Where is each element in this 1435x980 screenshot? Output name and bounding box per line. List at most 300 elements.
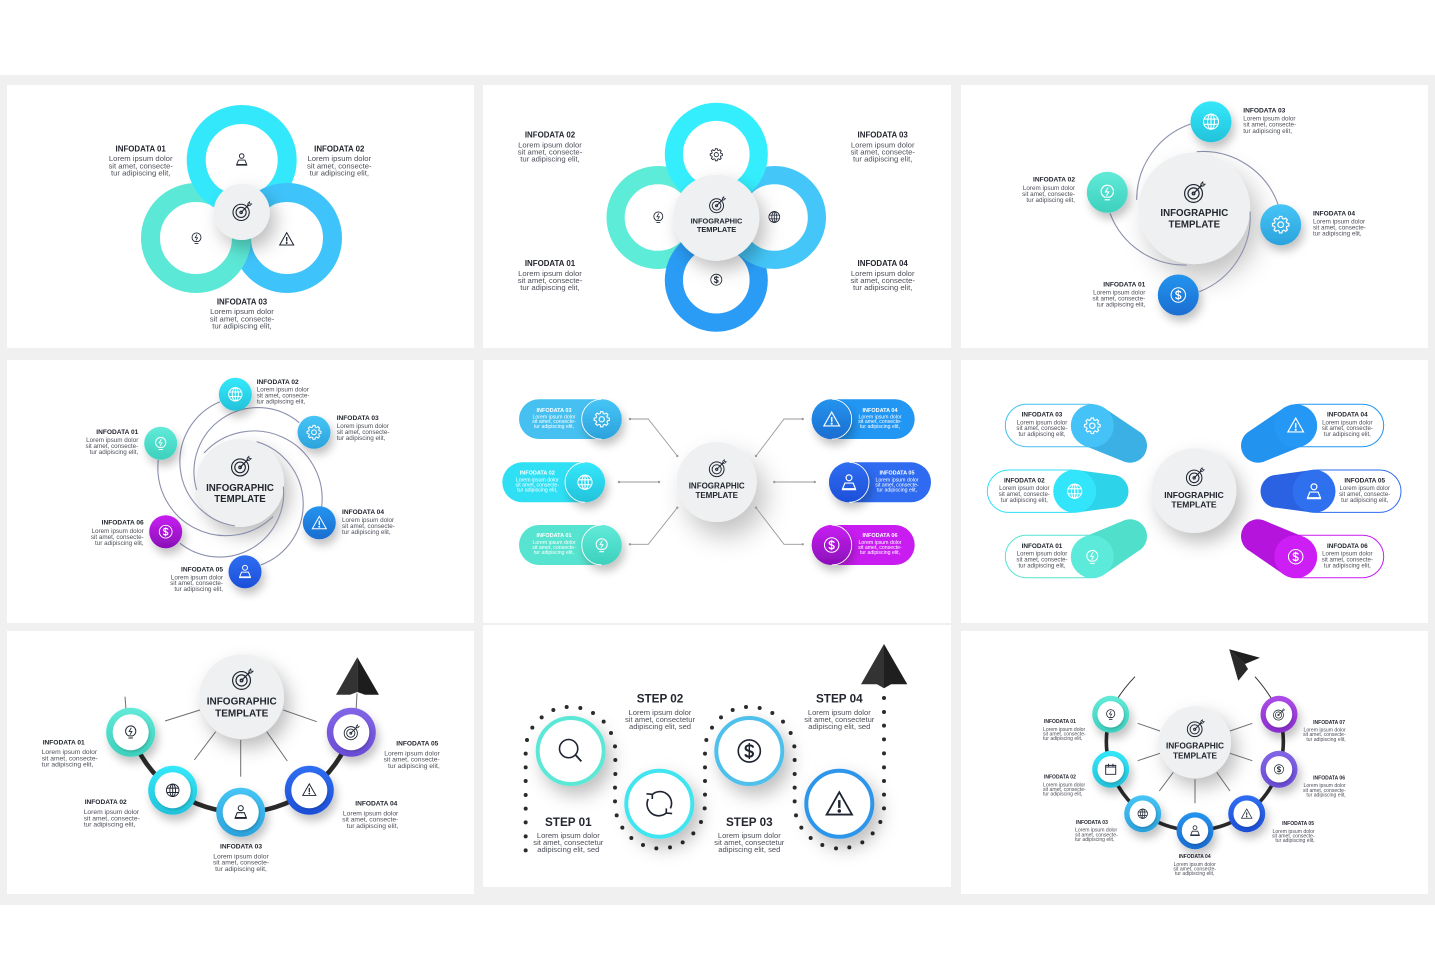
node: bulb [1092, 696, 1129, 733]
pill: infodata 01: sit amet, consecte- [532, 545, 576, 551]
text: infodata 06: INFODATA 06 [102, 520, 144, 527]
text: infodata 07: tur adipiscing elit, [1306, 737, 1346, 743]
node: dollar [1158, 274, 1199, 316]
text: infodata 04: sit amet, consecte- [1313, 225, 1366, 232]
text: infodata 03: INFODATA 03 [337, 415, 379, 422]
text: infodata 04: sit amet, consecte- [342, 523, 395, 530]
centre title [1160, 208, 1228, 230]
text: infodata 01: INFODATA 01 [1044, 719, 1076, 725]
text: infodata 04: Lorem ipsum dolor [343, 810, 399, 817]
pill: infodata 03 [1005, 404, 1147, 463]
centre title [691, 216, 743, 234]
text: infodata 03: tur adipiscing elit, [215, 866, 267, 873]
text: step 01: Lorem ipsum dolor [537, 831, 600, 840]
text: infodata 06: INFODATA 06 [1313, 776, 1345, 782]
pill: infodata 04: Lorem ipsum dolor [859, 414, 902, 420]
text: infodata 04: sit amet, consecte- [342, 817, 398, 824]
pill: infodata 02: INFODATA 02 [1004, 477, 1045, 484]
text: infodata 02 [518, 130, 583, 164]
pill: infodata 06: INFODATA 06 [1327, 543, 1368, 550]
pill: infodata 03: INFODATA 03 [1022, 412, 1063, 419]
text: infodata 01: Lorem ipsum dolor [1093, 290, 1145, 297]
text: infodata 05: tur adipiscing elit, [1275, 838, 1315, 844]
text: infodata 01: tur adipiscing elit, [111, 169, 170, 178]
pill: infodata 05: INFODATA 05 [1344, 477, 1385, 484]
step 03 circle [716, 718, 782, 784]
text: infodata 02 [307, 144, 372, 178]
text: infodata 04: sit amet, consecte- [850, 276, 915, 285]
text: infodata 01: Lorem ipsum dolor [42, 749, 98, 756]
text: infodata 01: sit amet, consecte- [518, 276, 583, 285]
text: infodata 03 [210, 298, 275, 331]
text: infodata 02 [84, 799, 140, 828]
text: infodata 02: INFODATA 02 [525, 130, 576, 140]
node: globe [1124, 795, 1161, 832]
spiral arcs [158, 402, 322, 565]
pill: infodata 06: Lorem ipsum dolor [1322, 550, 1373, 558]
pill: infodata 01: Lorem ipsum dolor [1017, 550, 1067, 558]
top curves [1117, 677, 1272, 700]
centre title [1164, 490, 1224, 509]
text: infodata 03: INFODATA 03 [1243, 108, 1286, 115]
centre title: INFOGRAPHIC [689, 482, 745, 491]
pill: infodata 04 [812, 399, 915, 439]
icon: target [232, 456, 251, 476]
text: infodata 01: Lorem ipsum dolor [109, 154, 173, 163]
pill: infodata 02 [987, 470, 1129, 513]
text: infodata 04: INFODATA 04 [1313, 210, 1355, 217]
text: infodata 07: sit amet, consecte- [1303, 732, 1346, 738]
text: infodata 02: INFODATA 02 [1033, 177, 1075, 184]
text: step 03: STEP 03 [726, 816, 773, 829]
text: infodata 01: Lorem ipsum dolor [518, 269, 582, 278]
text: infodata 02: Lorem ipsum dolor [1043, 782, 1085, 788]
text: infodata 02: sit amet, consecte- [257, 393, 310, 400]
text: infodata 01 [85, 429, 139, 456]
text: infodata 03: tur adipiscing elit, [1243, 128, 1292, 135]
panel: four overlapping rings [483, 85, 951, 348]
text: infodata 05 [384, 741, 440, 770]
pill: infodata 05: sit amet, consecte- [1339, 491, 1390, 498]
centre title: INFOGRAPHIC [1164, 490, 1224, 500]
centre title: TEMPLATE [1173, 751, 1218, 761]
icon: target [233, 669, 253, 689]
icon: target [1187, 720, 1204, 737]
icon: target [1186, 468, 1204, 486]
text: step 04: STEP 04 [816, 692, 863, 706]
text: infodata 03: Lorem ipsum dolor [213, 853, 269, 860]
text: infodata 01: tur adipiscing elit, [1043, 736, 1082, 742]
text: infodata 01: INFODATA 01 [525, 259, 576, 268]
panel: four node orbit [961, 85, 1428, 348]
paper plane [1229, 649, 1260, 681]
pill: infodata 02: Lorem ipsum dolor [999, 485, 1050, 492]
text: step 04: sit amet, consectetur [804, 715, 875, 724]
icon: gear [710, 149, 722, 161]
icon: target [1185, 182, 1205, 202]
text: infodata 03: INFODATA 03 [217, 298, 268, 306]
text: infodata 04 [1313, 210, 1366, 238]
text: infodata 04: INFODATA 04 [858, 259, 908, 268]
centre disc [1159, 706, 1231, 778]
centre title: TEMPLATE [215, 708, 269, 719]
centre title: INFOGRAPHIC [206, 483, 274, 494]
ring: cyan [196, 114, 287, 206]
node: dollar [1260, 751, 1298, 788]
dotted path [524, 696, 886, 852]
pill: infodata 01: tur adipiscing elit, [1018, 562, 1066, 570]
text: infodata 05: sit amet, consecte- [170, 580, 223, 587]
text: step 02 [625, 692, 696, 731]
text: infodata 01: Lorem ipsum dolor [1043, 727, 1085, 733]
text: infodata 02: Lorem ipsum dolor [518, 140, 582, 149]
text: infodata 02: INFODATA 02 [257, 379, 299, 386]
text: infodata 02: sit amet, consecte- [84, 815, 140, 822]
pill: infodata 03: sit amet, consecte- [532, 419, 576, 425]
text: infodata 03: INFODATA 03 [1076, 820, 1108, 826]
centre title [689, 482, 745, 500]
pill: infodata 01: sit amet, consecte- [1016, 556, 1068, 564]
pill: infodata 03: Lorem ipsum dolor [533, 414, 576, 420]
panel: three overlapping rings [7, 85, 474, 348]
text: infodata 01: tur adipiscing elit, [42, 762, 94, 769]
text: infodata 02: tur adipiscing elit, [1043, 792, 1082, 798]
ring: blue [242, 192, 332, 284]
pill: infodata 03: Lorem ipsum dolor [1017, 420, 1067, 426]
centre title: INFOGRAPHIC [1166, 741, 1224, 751]
text: infodata 04: tur adipiscing elit, [347, 823, 398, 830]
node: globe [1190, 101, 1232, 142]
text: infodata 04: tur adipiscing elit, [1175, 871, 1214, 877]
text: step 01: adipiscing elit, sed [537, 845, 599, 854]
connectors [618, 418, 816, 546]
text: step 01: STEP 01 [545, 816, 592, 829]
text: infodata 04: sit amet, consecte- [1173, 866, 1216, 872]
text: infodata 06: tur adipiscing elit, [1306, 792, 1346, 798]
text: infodata 01: sit amet, consecte- [108, 161, 173, 170]
pill: infodata 03: tur adipiscing elit, [534, 424, 574, 430]
text: infodata 03: sit amet, consecte- [213, 860, 269, 867]
centre title: INFOGRAPHIC [1160, 208, 1228, 219]
text: infodata 04 [342, 509, 395, 536]
pill: infodata 03: sit amet, consecte- [1016, 425, 1068, 432]
pill: infodata 05: INFODATA 05 [879, 471, 915, 477]
pill: infodata 06 [1241, 519, 1384, 578]
node: bulb [106, 708, 155, 757]
pill: infodata 02: tur adipiscing elit, [1001, 497, 1048, 504]
text: infodata 03: sit amet, consecte- [210, 314, 275, 323]
text: infodata 01 [1043, 719, 1086, 742]
node: globe [219, 378, 252, 411]
pill: infodata 05 [829, 462, 931, 502]
text: infodata 04: Lorem ipsum dolor [851, 269, 915, 278]
centre disc [1152, 448, 1236, 533]
text: infodata 02 [257, 379, 310, 406]
node: gear [298, 416, 330, 449]
text: infodata 05 [170, 566, 223, 593]
centre disc [1138, 152, 1250, 264]
node: warning [1228, 795, 1265, 832]
text: infodata 06 [1303, 776, 1346, 798]
text: infodata 02: sit amet, consecte- [518, 148, 583, 156]
centre disc [214, 184, 270, 240]
pill: infodata 04: sit amet, consecte- [858, 419, 902, 425]
text: infodata 04 [850, 259, 915, 292]
text: infodata 04: INFODATA 04 [355, 801, 398, 808]
icon: target [709, 460, 726, 477]
text: step 03 [714, 816, 785, 854]
pill: infodata 05: Lorem ipsum dolor [876, 478, 919, 484]
text: step 02: adipiscing elit, sed [629, 722, 691, 731]
ring: blue overlap [260, 183, 336, 212]
text: infodata 02: tur adipiscing elit, [310, 169, 369, 178]
text: infodata 03: Lorem ipsum dolor [210, 307, 274, 316]
pill: infodata 01: Lorem ipsum dolor [533, 540, 576, 546]
pill: infodata 01 [519, 525, 622, 565]
text: infodata 01: sit amet, consecte- [1092, 296, 1145, 303]
text: infodata 05: sit amet, consecte- [1272, 834, 1315, 840]
panel: pills with connectors [483, 360, 951, 623]
node: bulb [144, 427, 177, 460]
text: infodata 01: tur adipiscing elit, [1097, 302, 1146, 309]
panel: outlined pills with tails [961, 360, 1428, 623]
text: infodata 03: INFODATA 03 [858, 130, 908, 140]
node: bulb [1087, 172, 1128, 213]
panel: seven step arc with plane [961, 631, 1428, 894]
ring: teal [616, 175, 700, 260]
text: infodata 01 [42, 740, 98, 769]
text: step 03: sit amet, consectetur [714, 838, 785, 847]
text: infodata 01: tur adipiscing elit, [90, 449, 139, 456]
node: warning [303, 506, 336, 539]
pill: infodata 06: sit amet, consecte- [858, 545, 902, 551]
text: infodata 03: tur adipiscing elit, [337, 435, 386, 442]
spokes [125, 693, 357, 777]
node: gear [1260, 204, 1301, 245]
text: infodata 05: sit amet, consecte- [384, 757, 440, 764]
text: infodata 02: sit amet, consecte- [1043, 787, 1086, 793]
text: infodata 04: tur adipiscing elit, [1313, 231, 1362, 238]
text: infodata 02: tur adipiscing elit, [520, 155, 580, 164]
panel: four steps dotted path [483, 625, 951, 887]
text: infodata 05: INFODATA 05 [396, 741, 439, 748]
text: infodata 07: INFODATA 07 [1313, 720, 1345, 726]
pill: infodata 01: INFODATA 01 [1022, 543, 1063, 550]
pill: infodata 04: INFODATA 04 [1327, 412, 1368, 419]
text: infodata 03: sit amet, consecte- [850, 148, 915, 156]
text: step 04: Lorem ipsum dolor [808, 708, 871, 717]
pill: infodata 04 [1241, 404, 1384, 463]
text: infodata 04: tur adipiscing elit, [342, 529, 391, 536]
text: step 02: STEP 02 [637, 692, 684, 706]
text: infodata 01: Lorem ipsum dolor [86, 437, 138, 444]
text: infodata 04: tur adipiscing elit, [853, 283, 912, 292]
icon: dollar [711, 274, 722, 285]
icon: warning [280, 233, 294, 245]
text: infodata 03: sit amet, consecte- [1243, 122, 1296, 129]
pill: infodata 04: INFODATA 04 [862, 408, 898, 414]
pill: infodata 03: INFODATA 03 [536, 408, 572, 414]
centre title: TEMPLATE [695, 491, 739, 500]
pill: infodata 05: sit amet, consecte- [875, 482, 919, 488]
pill: infodata 02: sit amet, consecte- [999, 491, 1050, 498]
pill: infodata 04: tur adipiscing elit, [1324, 431, 1371, 438]
node: target [1260, 696, 1298, 733]
text: step 04 [804, 692, 875, 731]
text: infodata 01: INFODATA 01 [1103, 281, 1146, 288]
pill: infodata 01 [1005, 519, 1147, 578]
icon: person [236, 154, 247, 165]
text: infodata 04 [342, 801, 399, 830]
text: infodata 01: INFODATA 01 [116, 144, 166, 154]
text: infodata 03: INFODATA 03 [220, 844, 262, 851]
text: infodata 06: Lorem ipsum dolor [92, 528, 144, 535]
text: infodata 02: INFODATA 02 [314, 144, 365, 154]
step 02 circle [626, 771, 692, 837]
text: infodata 04: INFODATA 04 [1179, 854, 1211, 860]
text: step 01 [533, 816, 604, 854]
orbit arcs [1110, 124, 1278, 292]
arc path [131, 732, 351, 812]
panel: six node spiral [7, 360, 474, 623]
text: infodata 02: INFODATA 02 [85, 799, 127, 806]
pill: infodata 06 [812, 525, 915, 565]
icon: target [710, 197, 726, 213]
pill: infodata 03 [519, 399, 622, 439]
centre title: TEMPLATE [1171, 499, 1217, 509]
text: infodata 03: sit amet, consecte- [337, 429, 390, 436]
ring: bottom blue [674, 238, 759, 323]
text: infodata 02: tur adipiscing elit, [1026, 197, 1075, 204]
pill: infodata 05: tur adipiscing elit, [1341, 497, 1389, 504]
text: infodata 02: sit amet, consecte- [307, 161, 372, 170]
pill: infodata 05: Lorem ipsum dolor [1339, 485, 1390, 492]
text: infodata 04: INFODATA 04 [342, 509, 384, 516]
text: infodata 07 [1303, 720, 1346, 743]
text: infodata 01: sit amet, consecte- [1043, 732, 1086, 738]
pill: infodata 06: sit amet, consecte- [1322, 556, 1373, 564]
text: infodata 05 [1272, 821, 1315, 844]
centre title: INFOGRAPHIC [207, 697, 277, 708]
node: dollar [149, 515, 182, 548]
text: infodata 03: sit amet, consecte- [1075, 832, 1118, 838]
text: infodata 07: Lorem ipsum dolor [1304, 728, 1346, 734]
pill: infodata 05: tur adipiscing elit, [877, 488, 917, 494]
pill: infodata 02: sit amet, consecte- [516, 482, 559, 488]
text: infodata 03: tur adipiscing elit, [853, 155, 912, 164]
centre title: TEMPLATE [1169, 220, 1221, 230]
text: infodata 02: sit amet, consecte- [1022, 191, 1075, 198]
arc path [1106, 714, 1283, 830]
text: infodata 01 [108, 144, 173, 178]
text: step 04: adipiscing elit, sed [808, 722, 870, 731]
icon: bulb [654, 212, 663, 222]
pill: infodata 02 [502, 462, 605, 502]
step 04 circle [806, 771, 872, 837]
node: calendar [1092, 751, 1129, 788]
pill: infodata 01: tur adipiscing elit, [534, 550, 574, 556]
text: infodata 01: tur adipiscing elit, [520, 283, 580, 292]
text: infodata 05: INFODATA 05 [1282, 821, 1314, 827]
text: infodata 02: Lorem ipsum dolor [84, 809, 140, 816]
pill: infodata 03: tur adipiscing elit, [1018, 431, 1066, 438]
node: warning [285, 766, 334, 815]
pill: infodata 06: tur adipiscing elit, [860, 550, 900, 556]
text: step 02: Lorem ipsum dolor [629, 708, 692, 717]
text: infodata 01: sit amet, consecte- [85, 443, 138, 450]
pill: infodata 04: sit amet, consecte- [1322, 425, 1373, 432]
text: infodata 05: Lorem ipsum dolor [1273, 829, 1315, 835]
panel: five step arc with plane [7, 631, 474, 894]
text: infodata 02: Lorem ipsum dolor [1023, 185, 1075, 192]
centre title: TEMPLATE [214, 494, 266, 505]
node: person [1176, 812, 1214, 849]
ring: teal [150, 192, 242, 284]
text: infodata 06: sit amet, consecte- [1303, 788, 1346, 794]
text: infodata 05: tur adipiscing elit, [388, 763, 440, 770]
text: infodata 03: Lorem ipsum dolor [337, 423, 389, 430]
node: globe [148, 766, 197, 815]
centre disc [677, 442, 757, 522]
text: infodata 03: tur adipiscing elit, [212, 322, 272, 331]
text: infodata 03 [337, 415, 390, 442]
text: infodata 06 [91, 520, 144, 547]
text: infodata 02: Lorem ipsum dolor [257, 387, 309, 394]
text: infodata 05: Lorem ipsum dolor [384, 750, 440, 757]
pill: infodata 02: INFODATA 02 [520, 471, 555, 477]
pill: infodata 04: tur adipiscing elit, [860, 424, 900, 430]
step 01 circle [538, 718, 604, 784]
text: infodata 04: Lorem ipsum dolor [342, 517, 394, 524]
text: infodata 04: Lorem ipsum dolor [1313, 219, 1365, 226]
centre disc [673, 175, 759, 261]
pill: infodata 04: Lorem ipsum dolor [1322, 420, 1373, 426]
pill: infodata 01: INFODATA 01 [536, 533, 572, 539]
centre title [207, 697, 277, 719]
text: infodata 02 [1022, 177, 1075, 204]
text: infodata 03: tur adipiscing elit, [1075, 837, 1114, 843]
text: step 01: sit amet, consectetur [533, 838, 604, 847]
node: person [216, 788, 265, 837]
text: infodata 03: Lorem ipsum dolor [1075, 828, 1117, 834]
text: infodata 01 [518, 259, 583, 292]
pill: infodata 02: Lorem ipsum dolor [516, 478, 559, 484]
text: infodata 05: Lorem ipsum dolor [171, 575, 223, 582]
centre disc [199, 654, 284, 739]
node: person [228, 555, 262, 588]
pill: infodata 06: tur adipiscing elit, [1324, 562, 1371, 570]
text: infodata 01 [1092, 281, 1146, 309]
text: infodata 02: Lorem ipsum dolor [307, 154, 372, 163]
ring: right sky [732, 175, 817, 260]
text: infodata 04: Lorem ipsum dolor [1174, 862, 1216, 868]
text: infodata 01: sit amet, consecte- [42, 755, 98, 762]
text: infodata 06: tur adipiscing elit, [95, 540, 144, 547]
pill: infodata 06: Lorem ipsum dolor [859, 540, 902, 546]
icon: bulb [192, 233, 201, 243]
centre title: TEMPLATE [697, 225, 736, 234]
centre title: INFOGRAPHIC [691, 216, 743, 225]
text: infodata 02 [1043, 774, 1086, 798]
text: infodata 03 [1243, 108, 1296, 135]
text: step 03: adipiscing elit, sed [718, 845, 780, 854]
centre title [206, 483, 274, 505]
node: target [327, 708, 376, 757]
ring: top cyan [674, 112, 759, 197]
spokes [1138, 723, 1252, 803]
text: infodata 05: tur adipiscing elit, [174, 586, 223, 593]
text: infodata 03 [1075, 820, 1118, 843]
